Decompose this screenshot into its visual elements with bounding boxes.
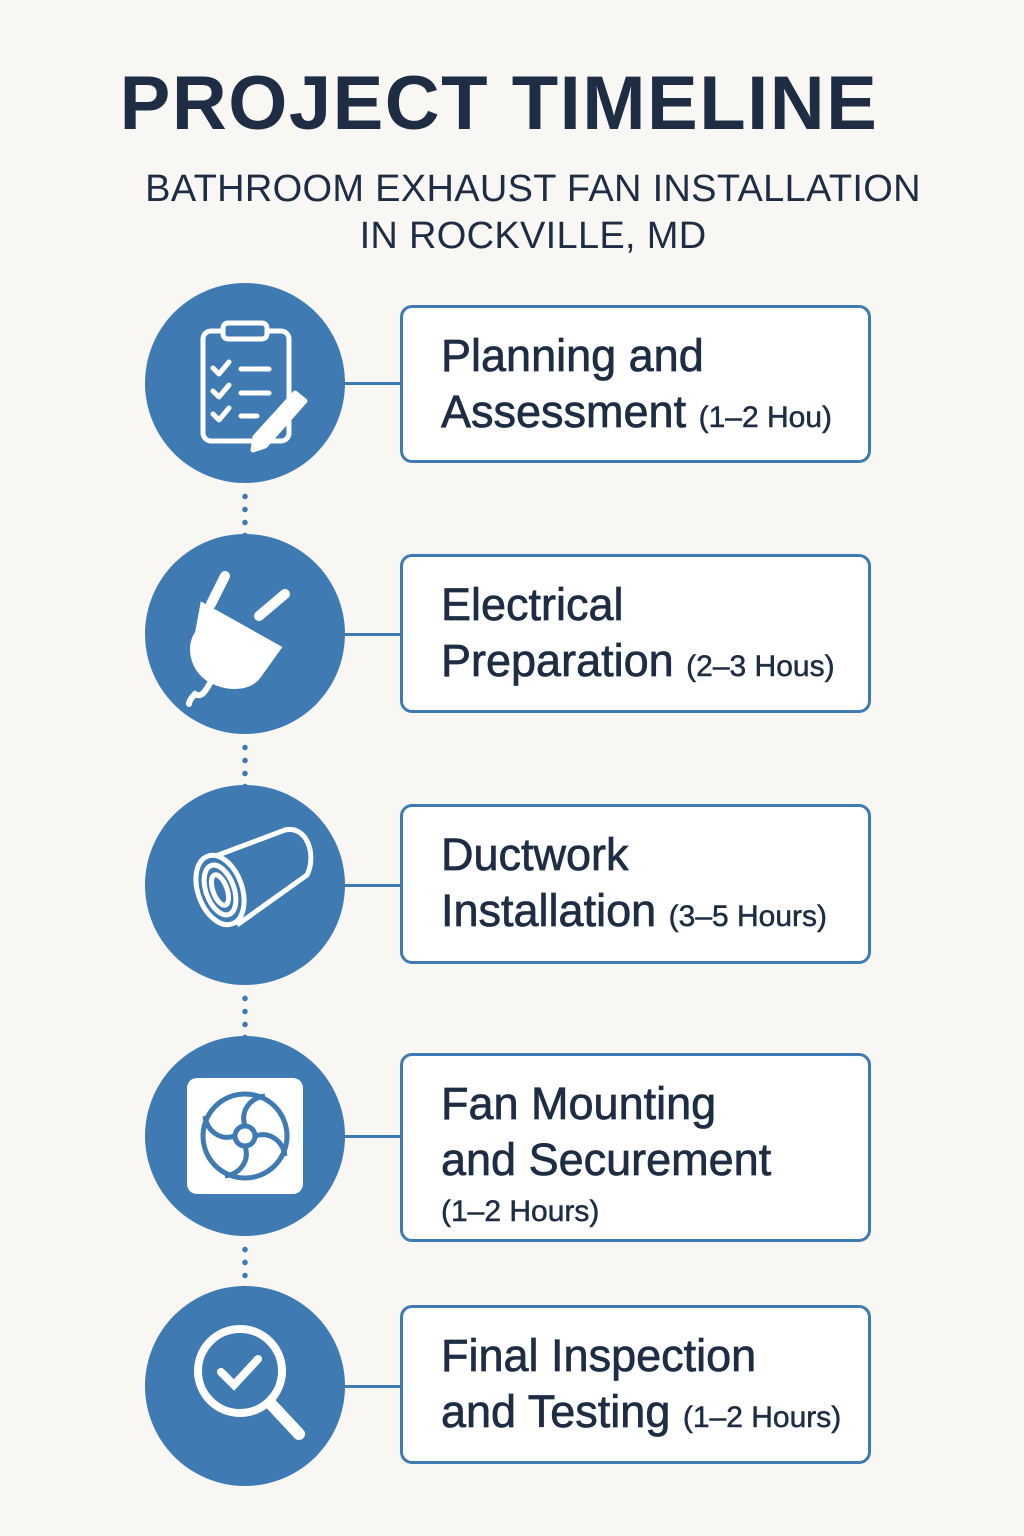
title: PROJECT TIMELINE xyxy=(120,61,878,146)
box: step 1: Planning and xyxy=(441,330,704,381)
box: step 4: (1–2 Hours) xyxy=(441,1195,599,1228)
connector lines xyxy=(343,382,401,385)
box: step 3: Installation (3–5 Hours) xyxy=(441,885,827,936)
dotted connector xyxy=(242,490,248,542)
box: step 3: Ductwork xyxy=(441,829,629,880)
subtitle: BATHROOM EXHAUST FAN INSTALLATION xyxy=(145,168,921,210)
box: step 5: Final Inspection xyxy=(441,1330,756,1381)
dotted connector xyxy=(242,992,248,1044)
box: step 5 xyxy=(400,1305,871,1464)
box: step 4 xyxy=(400,1053,871,1242)
dotted connector xyxy=(242,1243,248,1295)
step 2 icon: plug xyxy=(145,534,345,734)
subtitle: IN ROCKVILLE, MD xyxy=(360,215,706,257)
step 1 icon: clipboard xyxy=(145,283,345,483)
box: step 1: Assessment (1–2 Hou) xyxy=(441,386,832,437)
box: step 4: Fan Mounting xyxy=(441,1078,716,1129)
box: step 4: and Securement xyxy=(441,1134,771,1185)
box: step 3 xyxy=(400,804,871,964)
box: step 5: and Testing (1–2 Hours) xyxy=(441,1386,841,1437)
step 3 icon: duct xyxy=(145,785,345,985)
box: step 2: Electrical xyxy=(441,579,624,630)
box: step 2 xyxy=(400,554,871,713)
step 5 icon: magnifier xyxy=(145,1286,345,1486)
step 4 icon: fan xyxy=(145,1036,345,1236)
box: step 2: Preparation (2–3 Hous) xyxy=(441,635,835,686)
dotted connector xyxy=(242,741,248,793)
subtitle xyxy=(145,168,921,257)
box: step 1 xyxy=(400,305,871,463)
